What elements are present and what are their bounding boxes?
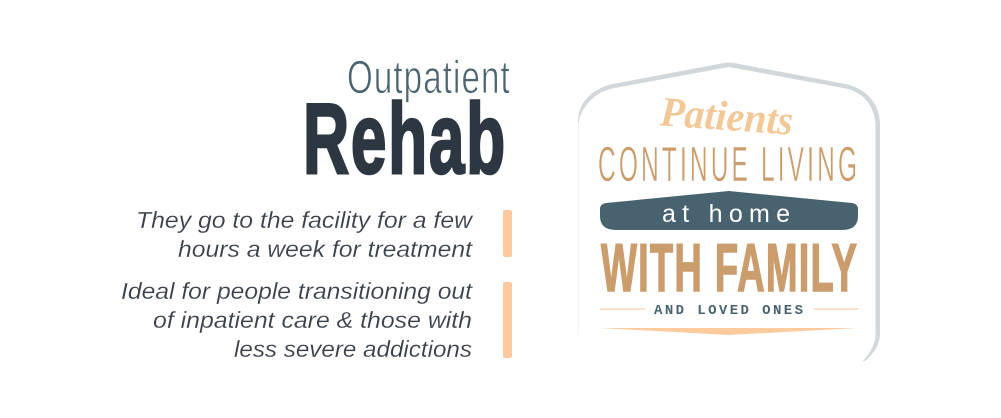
- text block: facility visits: [136, 207, 474, 262]
- left rule: [600, 308, 645, 310]
- title: [303, 53, 510, 194]
- text block: facility visits: hours a week for treatment: [178, 236, 474, 262]
- banner: at home: [600, 191, 858, 230]
- badge left edge: [578, 126, 579, 335]
- badge text: WITH FAMILY: WITH FAMILY: [601, 229, 857, 306]
- banner text: at home: [662, 200, 790, 228]
- text block: ideal candidates: less severe addictions: [234, 336, 473, 362]
- heading: Rehab: Rehab: [303, 82, 505, 194]
- text block: ideal candidates: Ideal for people transitioning out: [121, 278, 474, 304]
- banner shape: [600, 191, 858, 230]
- text block: ideal candidates: of inpatient care & those with: [153, 307, 472, 333]
- right rule: [813, 308, 858, 310]
- badge text: AND LOVED ONES: AND LOVED ONES: [654, 303, 803, 319]
- heading: Outpatient: Outpatient: [347, 53, 510, 103]
- bottom chevron: [600, 328, 858, 335]
- text block: facility visits: They go to the facility for a few: [136, 207, 473, 233]
- badge text: CONTINUE LIVING: CONTINUE LIVING: [598, 138, 857, 192]
- text block: ideal candidates: [121, 278, 474, 362]
- accent bar: facility visits: [503, 210, 512, 257]
- badge outline: [578, 62, 880, 361]
- accent bar: ideal candidates: [503, 282, 512, 358]
- badge: [578, 62, 880, 364]
- badge inner panel: [578, 67, 876, 364]
- badge text: Patients: Patients: [658, 89, 795, 145]
